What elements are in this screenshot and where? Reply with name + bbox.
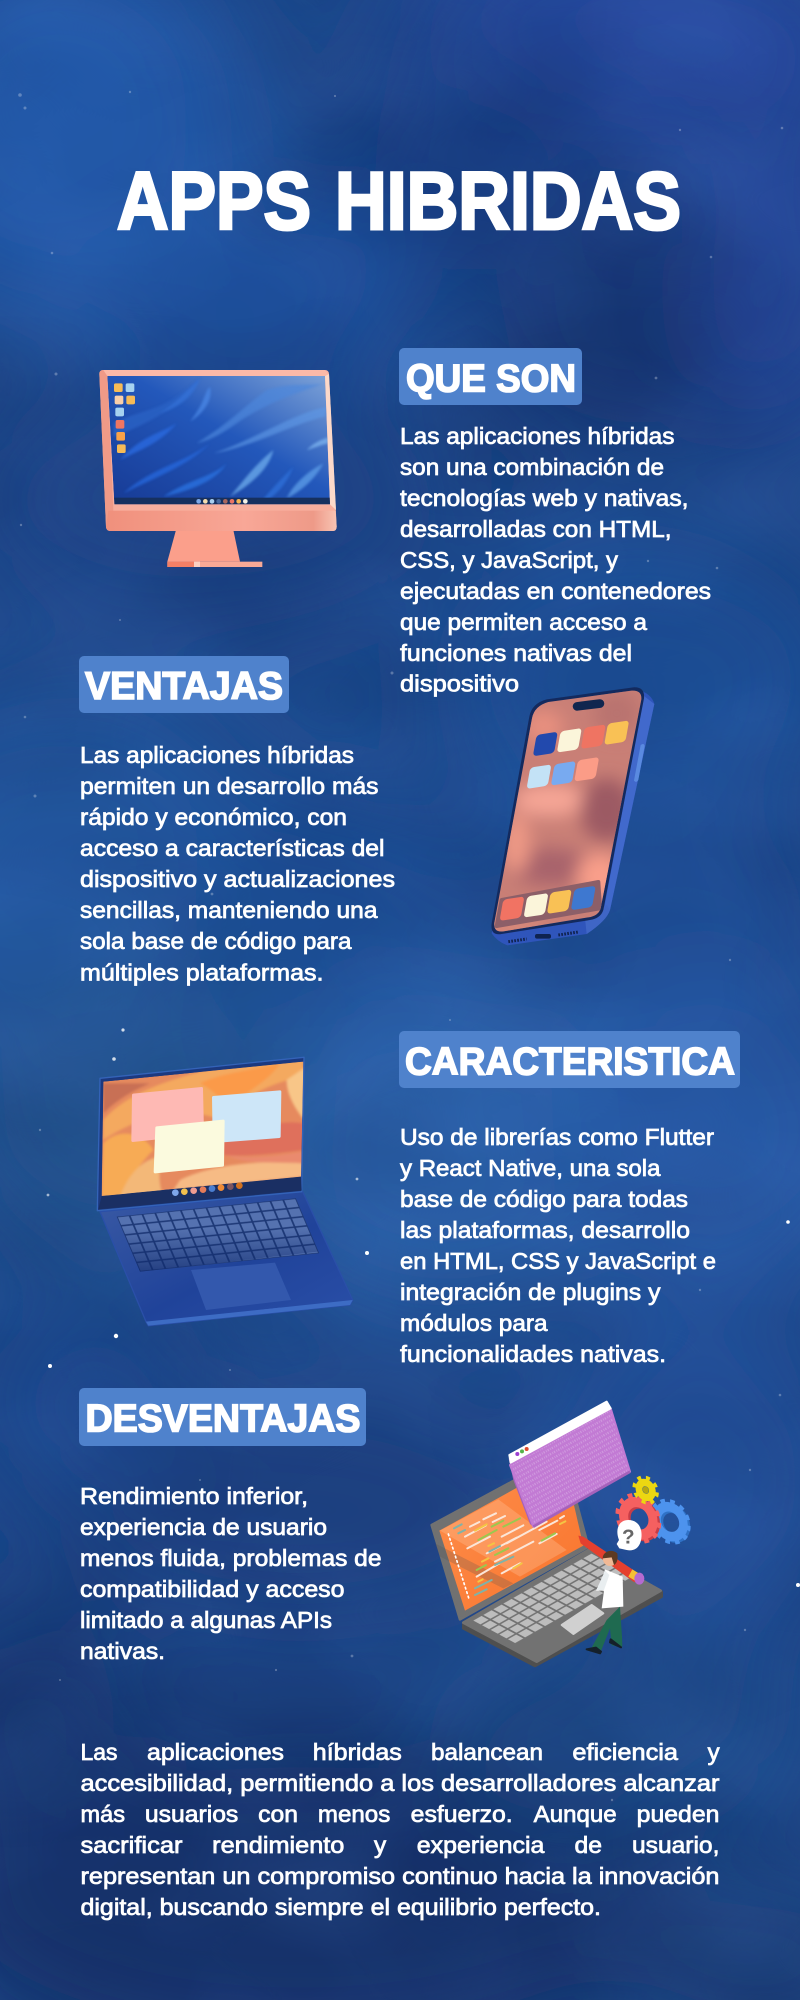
closing paragraph: menos (318, 1801, 390, 1827)
closing paragraph: balancean (431, 1739, 543, 1765)
text block: que son: Las aplicaciones híbridas (400, 423, 674, 449)
text block: que son: tecnologías web y nativas, (400, 485, 688, 511)
text block: desventajas: experiencia de usuario (80, 1514, 327, 1540)
closing paragraph: eficiencia (572, 1739, 678, 1765)
text block: caracteristica: base de código para todas (400, 1186, 688, 1212)
heading badge: CARACTERISTICA: CARACTERISTICA (405, 1040, 735, 1084)
text block: que son: CSS, y JavaScript, y (400, 547, 619, 573)
illustration: laptop (97, 1057, 353, 1326)
text block: caracteristica: en HTML, CSS y JavaScript e (400, 1248, 716, 1274)
text block: desventajas: Rendimiento inferior, (80, 1483, 308, 1509)
closing paragraph: representan un compromiso continuo hacia la innovación (80, 1863, 720, 1889)
closing paragraph: usuario, (632, 1832, 719, 1858)
text block: caracteristica: Uso de librerías como Flutter (400, 1124, 714, 1150)
illustration: desktop computer (99, 370, 337, 567)
text block: ventajas: múltiples plataformas. (80, 960, 324, 986)
title: HIBRIDAS (335, 156, 681, 247)
text block: desventajas: limitado a algunas APIs (80, 1607, 332, 1633)
heading badge: QUE SON: QUE SON (406, 358, 576, 400)
closing paragraph: esfuerzo. (411, 1801, 513, 1827)
illustration: developer with laptop, code window and gears: ? (622, 1525, 635, 1548)
text block: ventajas: dispositivo y actualizaciones (80, 866, 395, 892)
text block: caracteristica: las plataformas, desarrollo (400, 1217, 690, 1243)
closing paragraph: y (374, 1832, 387, 1858)
text block: que son: desarrolladas con HTML, (400, 516, 672, 542)
closing paragraph: sacrificar (80, 1832, 183, 1858)
text block: caracteristica: módulos para (400, 1310, 548, 1336)
closing paragraph: usuarios (145, 1801, 238, 1827)
closing paragraph: híbridas (313, 1739, 402, 1765)
title: APPS (117, 156, 311, 247)
text block: que son: dispositivo (400, 670, 519, 696)
text block: que son (400, 423, 711, 696)
text block: caracteristica: y React Native, una sola (400, 1155, 661, 1181)
text block: que son: son una combinación de (400, 454, 664, 480)
text block: que son: ejecutadas en contenedores (400, 578, 711, 604)
closing paragraph: digital, buscando siempre el equilibrio perfecto. (80, 1894, 601, 1920)
text block: que son: funciones nativas del (400, 640, 632, 666)
closing paragraph: Las (80, 1739, 118, 1765)
closing paragraph: pueden (637, 1801, 719, 1827)
text block: ventajas: sola base de código para (80, 928, 352, 954)
text block: ventajas: sencillas, manteniendo una (80, 897, 378, 923)
text block: ventajas: permiten un desarrollo más (80, 773, 378, 799)
closing paragraph: y (708, 1739, 720, 1765)
closing paragraph: accesibilidad, permitiendo a los desarrolladores alcanzar (80, 1770, 720, 1796)
text block: ventajas: Las aplicaciones híbridas (80, 742, 354, 768)
text block: desventajas (80, 1483, 382, 1664)
text block: caracteristica: integración de plugins y (400, 1279, 661, 1305)
text block: caracteristica: funcionalidades nativas. (400, 1341, 666, 1367)
closing paragraph: de (574, 1832, 602, 1858)
closing paragraph: rendimiento (212, 1832, 344, 1858)
closing paragraph: con (258, 1801, 298, 1827)
closing paragraph: experiencia (417, 1832, 545, 1858)
text block: que son: que permiten acceso a (400, 609, 647, 635)
text block: desventajas: compatibilidad y acceso (80, 1576, 344, 1602)
heading badge: DESVENTAJAS: DESVENTAJAS (86, 1398, 360, 1440)
closing paragraph: Aunque (534, 1801, 617, 1827)
closing paragraph (80, 1739, 720, 1920)
illustration: smartphone (483, 687, 654, 945)
text block: desventajas: nativas. (80, 1638, 165, 1664)
closing paragraph: más (80, 1801, 125, 1827)
text block: ventajas (80, 742, 395, 986)
text block: caracteristica (400, 1124, 716, 1367)
closing paragraph: aplicaciones (147, 1739, 284, 1765)
text block: ventajas: rápido y económico, con (80, 804, 347, 830)
text block: desventajas: menos fluida, problemas de (80, 1545, 382, 1571)
text block: ventajas: acceso a características del (80, 835, 384, 861)
heading badge: VENTAJAS: VENTAJAS (85, 665, 283, 708)
illustration: developer with laptop, code window and gears (432, 1402, 688, 1666)
